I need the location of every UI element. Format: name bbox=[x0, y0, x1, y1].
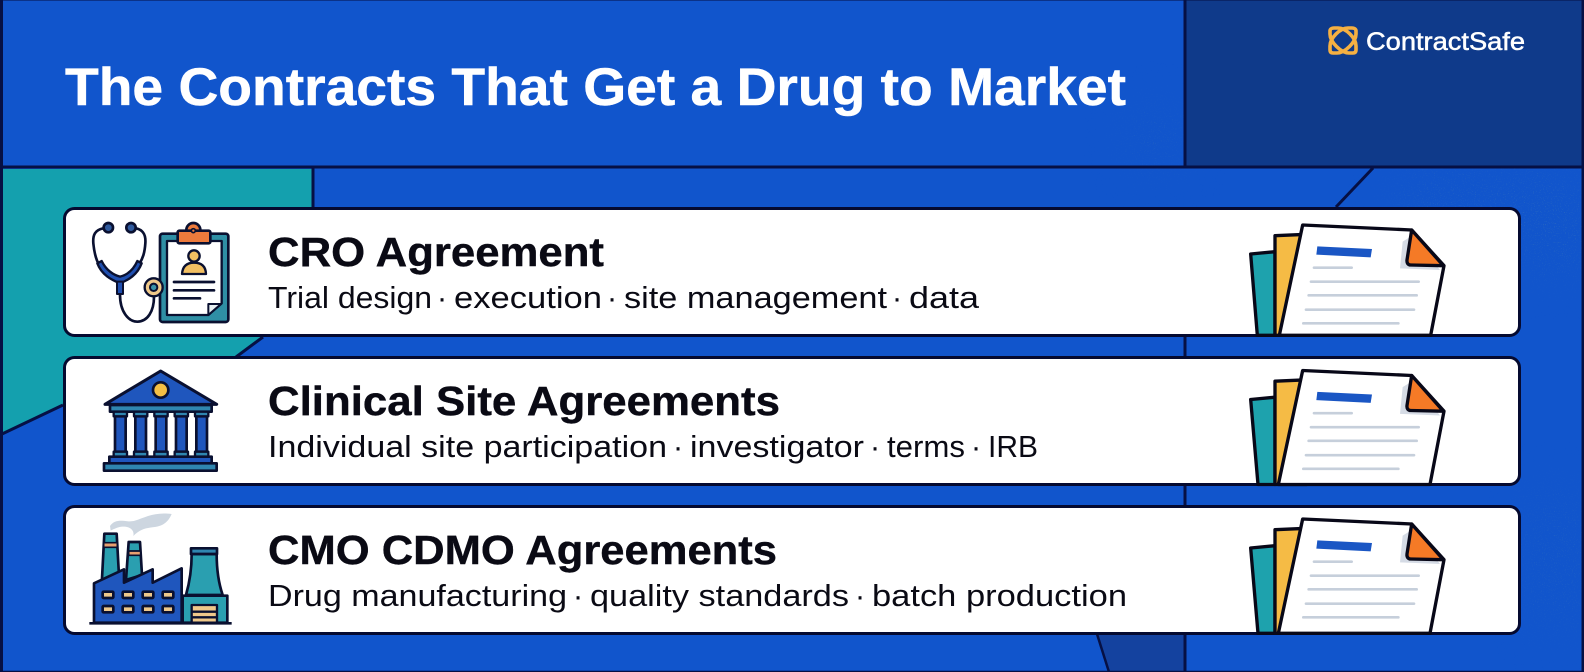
description: IRB bbox=[988, 429, 1038, 464]
logo wordmark: ContractSafe bbox=[1366, 28, 1525, 56]
icon: institution building bbox=[104, 371, 217, 471]
icon: documents bbox=[1251, 519, 1444, 633]
background bbox=[1098, 116, 1582, 671]
description: · bbox=[607, 280, 617, 315]
description: Individual site participation bbox=[268, 429, 667, 464]
description: · bbox=[855, 578, 865, 613]
icon: logo mark bbox=[1330, 28, 1356, 53]
icon: factory bbox=[89, 513, 232, 623]
description: site management bbox=[624, 280, 887, 315]
icon: stethoscope and clipboard bbox=[93, 223, 228, 322]
description: · bbox=[971, 429, 981, 464]
description: investigator bbox=[690, 429, 864, 464]
description: · bbox=[673, 429, 683, 464]
description: Drug manufacturing bbox=[268, 578, 567, 613]
description bbox=[268, 280, 980, 315]
icon: documents bbox=[1251, 370, 1444, 484]
heading: Clinical Site Agreements bbox=[268, 378, 780, 424]
panel: teal background shape bbox=[2, 167, 313, 434]
description: · bbox=[573, 578, 583, 613]
description: batch production bbox=[872, 578, 1127, 613]
description: data bbox=[909, 280, 980, 315]
description: · bbox=[437, 280, 447, 315]
panel: CMO CDMO Agreements card bbox=[64, 506, 1520, 634]
description: Trial design bbox=[268, 280, 432, 315]
description: · bbox=[892, 280, 902, 315]
description: quality standards bbox=[590, 578, 849, 613]
heading: CRO Agreement bbox=[268, 229, 604, 275]
logo: ContractSafe bbox=[1330, 28, 1525, 56]
panel: Clinical Site Agreements card bbox=[64, 358, 1520, 484]
description bbox=[268, 429, 1038, 464]
description bbox=[268, 578, 1127, 613]
description: terms bbox=[887, 429, 965, 464]
description: · bbox=[870, 429, 880, 464]
heading: CMO CDMO Agreements bbox=[268, 527, 777, 573]
panel: CRO Agreement card bbox=[64, 208, 1520, 336]
icon: documents bbox=[1251, 225, 1444, 335]
description: execution bbox=[454, 280, 602, 315]
title: The Contracts That Get a Drug to Market bbox=[65, 58, 1126, 117]
panel: logo background bbox=[1186, 0, 1582, 167]
